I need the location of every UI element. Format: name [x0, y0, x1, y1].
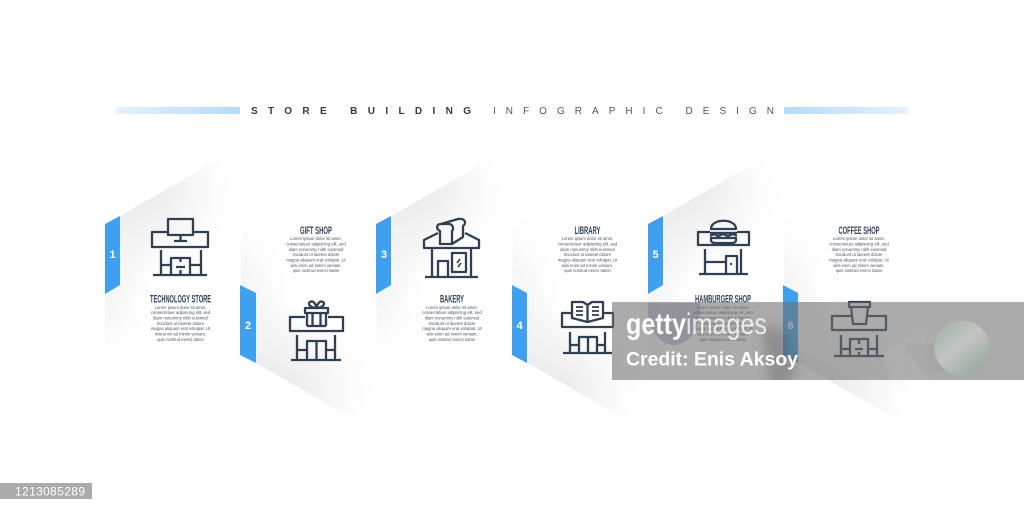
- body text: tincidunt ut laoreet dolore: [157, 321, 205, 326]
- number 3: 3: [381, 249, 387, 261]
- heading: BAKERY: [440, 294, 464, 306]
- heading: TECHNOLOGY STORE: [150, 294, 211, 306]
- body text: quis nostrud exerci tation: [429, 337, 476, 342]
- body text: diam nonummy nibh euismod: [425, 315, 480, 320]
- body text: tincidunt ut laoreet dolore: [428, 321, 476, 326]
- number 4: 4: [516, 320, 523, 332]
- panel 2: gift shop: [240, 214, 376, 421]
- body text: quis nostrud exerci tation: [564, 268, 611, 273]
- body text: Lorem ipsum dolor sit amet,: [833, 236, 885, 241]
- body text: quis nostrud exerci tation: [293, 268, 340, 273]
- ribbon 3: [376, 216, 391, 294]
- number 5: 5: [652, 249, 659, 261]
- ribbon 5: [648, 216, 663, 294]
- number 1: 1: [109, 249, 116, 261]
- ribbon 6: [783, 285, 798, 363]
- body text: consectetuer adipiscing elit, sed: [558, 242, 618, 247]
- ribbon 1: [105, 216, 120, 294]
- body text: Lorem ipsum dolor sit amet,: [290, 236, 342, 241]
- panel 4: library: [512, 214, 648, 421]
- watermark credit: Credit: Enis Aksoy: [626, 350, 798, 370]
- infographic canvas: [0, 107, 1024, 499]
- watermark band: [612, 302, 1024, 380]
- icon: library: [562, 302, 613, 353]
- body text: tincidunt ut laoreet dolore: [699, 321, 747, 326]
- icon: technology store: [152, 219, 208, 275]
- body text: diam nonummy nibh euismod: [696, 315, 751, 320]
- heading: LIBRARY: [574, 225, 601, 237]
- body text: magna aliquam erat volutpat. Ut: [286, 258, 347, 263]
- body text: tincidunt ut laoreet dolore: [292, 252, 340, 257]
- ribbon 2: [240, 285, 256, 363]
- body text: diam nonummy nibh euismod: [289, 247, 344, 252]
- body text: Lorem ipsum dolor sit amet,: [697, 305, 749, 310]
- body text: quis nostrud exerci tation: [157, 337, 204, 342]
- image id badge: [0, 483, 92, 499]
- body text: tincidunt ut laoreet dolore: [835, 252, 883, 257]
- heading: GIFT SHOP: [300, 225, 332, 237]
- icon: hamburger shop: [698, 221, 749, 274]
- body text: Lorem ipsum dolor sit amet,: [562, 236, 613, 241]
- panel 1: technology store: [105, 158, 240, 365]
- icon: gift shop: [290, 301, 343, 360]
- body text: quis nostrud exerci tation: [836, 268, 883, 273]
- body text: quis nostrud exerci tation: [700, 337, 747, 342]
- body text: wisi enim ad minim veniam,: [833, 263, 885, 268]
- body text: wisi enim ad minim veniam,: [426, 331, 478, 336]
- body text: magna aliquam erat volutpat. Ut: [558, 258, 618, 263]
- body text: wisi enim ad minim veniam,: [562, 263, 613, 268]
- body text: consectetuer adipiscing elit, sed: [693, 310, 753, 315]
- icon: coffee shop: [832, 302, 886, 356]
- heading: COFFEE SHOP: [838, 225, 880, 237]
- body text: diam nonummy nibh euismod: [832, 247, 887, 252]
- left title bar: [116, 107, 240, 114]
- body text: consectetuer adipiscing elit, sed: [422, 310, 482, 315]
- body text: Lorem ipsum dolor sit amet,: [426, 305, 478, 310]
- body text: wisi enim ad minim veniam,: [697, 331, 749, 336]
- body text: wisi enim ad minim veniam,: [290, 263, 342, 268]
- ribbon 4: [512, 285, 527, 363]
- body text: consectetuer adipiscing elit, sed: [286, 242, 346, 247]
- body text: wisi enim ad minim veniam,: [155, 331, 206, 336]
- number 6: 6: [787, 320, 794, 332]
- right title bar: [784, 107, 908, 114]
- body text: tincidunt ut laoreet dolore: [564, 252, 612, 257]
- icon: bakery: [424, 219, 479, 277]
- body text: magna aliquam erat volutpat. Ut: [829, 258, 890, 263]
- panel 6: coffee shop: [783, 214, 919, 421]
- body text: magna aliquam erat volutpat. Ut: [151, 326, 211, 331]
- title: [116, 106, 908, 117]
- body text: Lorem ipsum dolor sit amet,: [155, 305, 206, 310]
- title light part: INFOGRAPHIC DESIGN: [493, 106, 774, 117]
- number 2: 2: [245, 320, 251, 332]
- panel 5: hamburger shop: [648, 158, 783, 365]
- body text: diam nonummy nibh euismod: [153, 315, 209, 320]
- heading: HAMBURGER SHOP: [695, 294, 751, 306]
- panel 3: bakery: [376, 158, 512, 365]
- body text: magna aliquam erat volutpat. Ut: [422, 326, 483, 331]
- body text: consectetuer adipiscing elit, sed: [829, 242, 889, 247]
- title bold part: STORE BUILDING: [251, 106, 471, 117]
- watermark logo: gettyimages: [626, 308, 767, 341]
- body text: magna aliquam erat volutpat. Ut: [693, 326, 754, 331]
- body text: diam nonummy nibh euismod: [560, 247, 616, 252]
- body text: consectetuer adipiscing elit, sed: [151, 310, 211, 315]
- image id badge: 1213085289: [15, 484, 85, 498]
